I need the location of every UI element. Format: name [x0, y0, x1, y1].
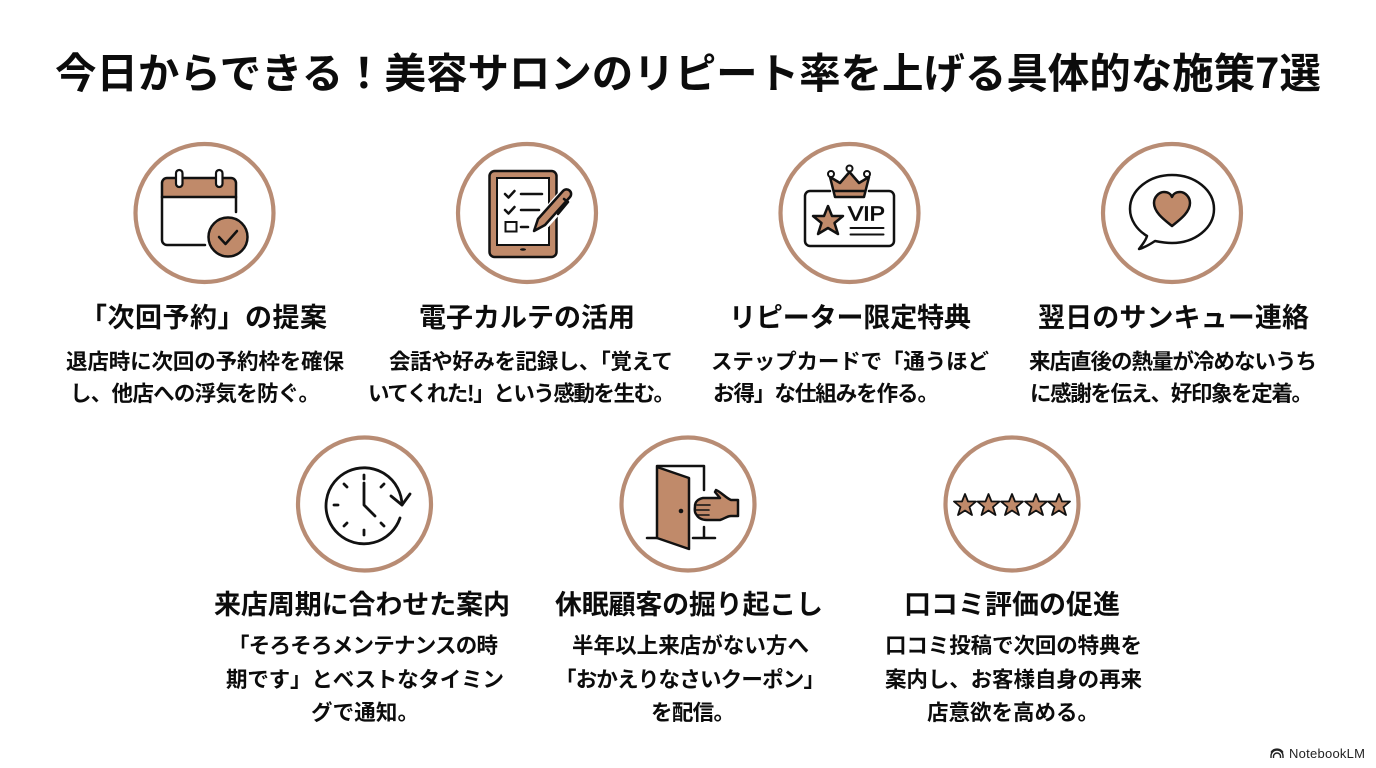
description: [555, 629, 825, 727]
panel: electronic chart: [368, 144, 675, 408]
icon: VIP card with crown: [780, 144, 918, 282]
heading: 翌日のサンキュー連絡: [1038, 296, 1309, 335]
description: [368, 345, 675, 408]
icon: calendar with check: [136, 144, 274, 282]
title: 今日からできる！美容サロンのリピート率を上げる具体的な施策7選: [55, 40, 1321, 100]
panel: dormant customers: [555, 438, 825, 727]
icon: tablet with checklist and pen: [458, 144, 596, 282]
description: 口コミ投稿で次回の特典を: [885, 629, 1142, 660]
description: お得」な仕組みを作る。: [713, 377, 939, 408]
description: いてくれた!」という感動を生む。: [368, 377, 675, 408]
description: 来店直後の熱量が冷めないうち: [1029, 345, 1317, 376]
icon: VIP card with crown: VIP: [848, 204, 885, 226]
panel: reviews: [885, 438, 1142, 727]
description: 「そろそろメンテナンスの時: [228, 629, 498, 660]
description: [711, 345, 989, 408]
description: グで通知。: [311, 696, 419, 727]
description: [885, 629, 1142, 727]
description: [66, 345, 344, 408]
description: 店意欲を高める。: [927, 696, 1099, 727]
icon: speech bubble with heart: [1103, 144, 1241, 282]
heading: 電子カルテの活用: [419, 296, 635, 335]
description: 会話や好みを記録し、「覚えて: [389, 345, 673, 376]
heading: 休眠顧客の掘り起こし: [555, 583, 823, 622]
description: 案内し、お客様自身の再来: [885, 663, 1142, 694]
panel: repeater benefits: [711, 144, 989, 408]
heading: 「次回予約」の提案: [80, 296, 327, 335]
icon: NotebookLM logo: [1271, 749, 1283, 758]
description: 期です」とベストなタイミン: [226, 663, 504, 694]
description: し、他店への浮気を防ぐ。: [70, 377, 320, 408]
description: 退店時に次回の予約枠を確保: [66, 345, 344, 376]
heading: リピーター限定特典: [729, 296, 971, 335]
panel: next reservation: [66, 144, 344, 408]
description: 半年以上来店がない方へ: [572, 629, 809, 660]
panel: visit cycle: [214, 438, 510, 727]
icon: clock with arrow: [298, 438, 431, 570]
description: [226, 629, 504, 727]
heading: 来店周期に合わせた案内: [214, 583, 510, 622]
description: ステップカードで「通うほど: [711, 345, 989, 376]
description: を配信。: [651, 696, 735, 727]
icon: five stars: [946, 438, 1078, 570]
description: に感謝を伝え、好印象を定着。: [1030, 377, 1313, 408]
description: 「おかえりなさいクーポン」: [555, 663, 825, 694]
icon: open door and hand: [622, 438, 754, 570]
heading: 口コミ評価の促進: [904, 583, 1120, 622]
panel: thank-you message: [1029, 144, 1317, 408]
watermark: NotebookLM: NotebookLM: [1289, 746, 1365, 761]
description: [1029, 345, 1317, 408]
